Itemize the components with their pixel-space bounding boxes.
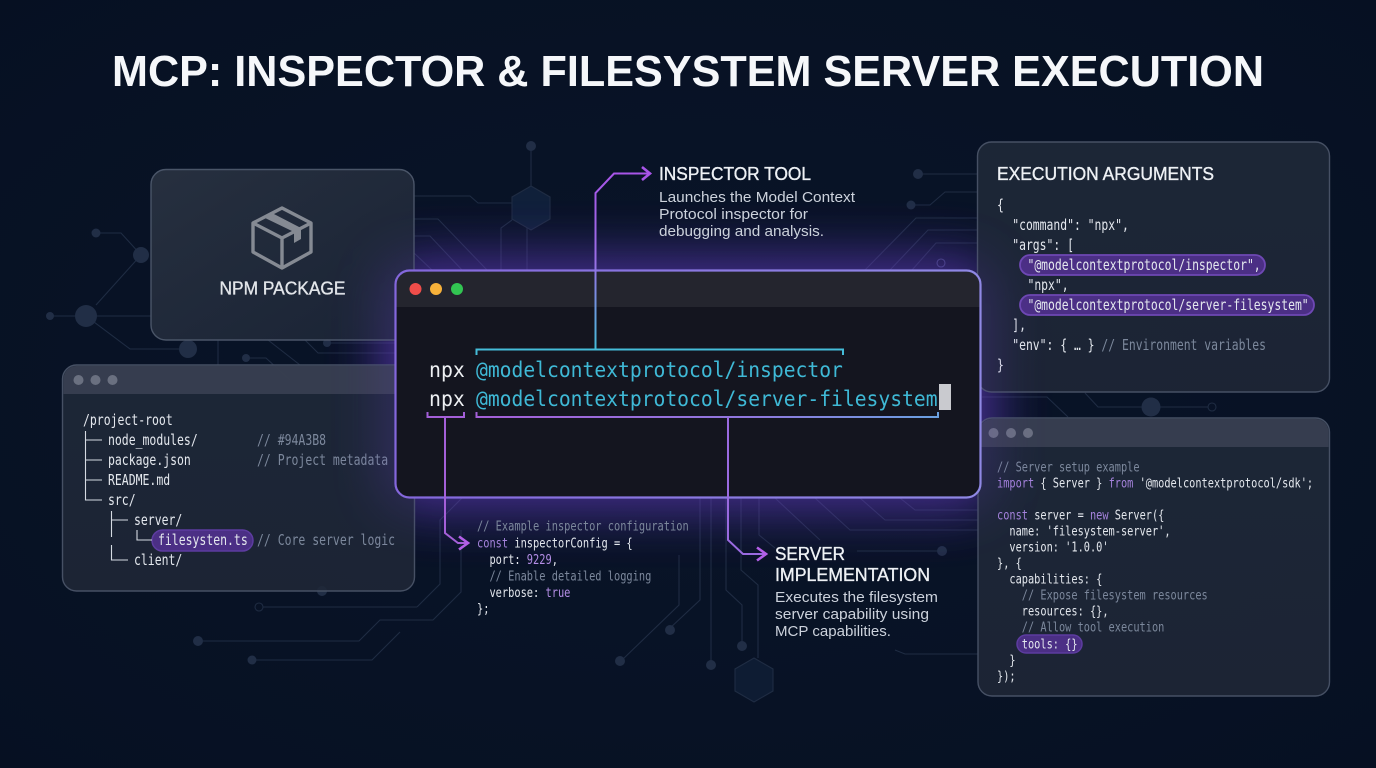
json code — [997, 198, 1309, 375]
circuit board traces — [46, 141, 1216, 702]
tree text: node_modules/ — [108, 433, 198, 449]
callout: inspector tool: Launches the Model Context — [659, 190, 855, 206]
window header — [979, 419, 1328, 447]
json code: "args": [ — [999, 238, 1074, 255]
json code: "env": { … } // Environment variables — [999, 338, 1266, 355]
arrow: to server implementation — [728, 417, 766, 560]
code block: inspector configuration: // Enable detailed logging — [477, 568, 651, 584]
code block: inspector configuration: const inspectorConfig = { — [477, 535, 633, 551]
server code — [997, 459, 1313, 684]
bracket: server package — [476, 412, 938, 417]
window header — [64, 366, 414, 394]
tree text: /project-root — [83, 413, 173, 429]
server code: }); — [997, 668, 1016, 684]
command text: npx — [429, 386, 465, 411]
tree text: // Project metadata — [257, 453, 388, 469]
server code: const server = new Server({ — [997, 507, 1164, 523]
json code: "@modelcontextprotocol/inspector", — [1000, 258, 1261, 275]
server code: }, { — [997, 555, 1022, 571]
callout: inspector tool: Protocol inspector for — [659, 207, 808, 223]
icon: package box — [253, 208, 311, 268]
panel: npm package — [151, 170, 414, 340]
panel: server setup code — [978, 418, 1330, 696]
server code: } — [997, 652, 1016, 668]
panel: terminal window — [396, 270, 980, 498]
window dots — [988, 428, 1033, 438]
server code: name: 'filesystem-server', — [997, 523, 1171, 539]
bracket: npx — [428, 412, 464, 417]
tree text: // Core server logic — [257, 533, 395, 549]
tree text: client/ — [134, 553, 182, 569]
terminal title bar — [396, 271, 980, 307]
server code: // Expose filesystem resources — [997, 587, 1208, 603]
package names — [476, 357, 938, 411]
cursor — [939, 384, 951, 410]
panel: project file tree — [62, 365, 414, 591]
server code: version: '1.0.0' — [997, 539, 1109, 555]
callout: server implementation: MCP capabilities. — [775, 624, 891, 640]
bracket: inspector package — [476, 350, 843, 355]
arrow: to inspector config — [445, 417, 468, 550]
json code: { — [997, 198, 1004, 215]
tree text: // #94A3B8 — [257, 433, 326, 449]
window dots — [74, 375, 118, 385]
tree text: server/ — [134, 513, 182, 529]
json code: "npx", — [1000, 278, 1069, 295]
heading: execution arguments: EXECUTION ARGUMENTS — [997, 164, 1214, 184]
callout: server implementation: IMPLEMENTATION — [775, 565, 930, 585]
callout: server implementation — [775, 544, 938, 640]
json code: "@modelcontextprotocol/server-filesystem" — [1000, 298, 1309, 315]
callout: server implementation: server capability using — [775, 607, 929, 623]
highlight: tools — [1017, 635, 1082, 653]
terminal glow — [385, 262, 991, 506]
callout: inspector tool: INSPECTOR TOOL — [659, 164, 811, 184]
terminal border — [396, 270, 980, 498]
command text — [429, 357, 465, 411]
json code: ], — [999, 318, 1026, 335]
code block: inspector configuration: verbose: true — [477, 585, 570, 600]
server code: // Allow tool execution — [997, 619, 1164, 635]
tree text: filesysten.ts — [158, 533, 248, 549]
server code: tools: {} — [997, 636, 1078, 652]
title: MCP: INSPECTOR & FILESYSTEM SERVER EXECUTION — [112, 48, 1264, 96]
arrow: to inspector tool — [596, 167, 650, 349]
server code: import { Server } from '@modelcontextprotocol/sdk'; — [997, 475, 1313, 491]
highlight: server argument — [1020, 295, 1314, 315]
server code: resources: {}, — [997, 603, 1109, 619]
callout: inspector tool: debugging and analysis. — [659, 224, 824, 240]
panel: execution arguments — [978, 142, 1330, 392]
code block: inspector configuration: // Example inspector configuration — [477, 518, 689, 534]
json code: } — [997, 358, 1004, 375]
package names: @modelcontextprotocol/server-filesystem — [476, 386, 938, 411]
server code: // Server setup example — [997, 459, 1140, 475]
highlight: inspector argument — [1020, 255, 1265, 275]
tree text — [83, 413, 395, 569]
callout: inspector tool — [659, 164, 855, 240]
tree text: package.json — [108, 453, 191, 469]
code block: inspector configuration — [477, 518, 689, 616]
json code: "command": "npx", — [999, 218, 1129, 235]
package names: @modelcontextprotocol/inspector — [476, 357, 843, 382]
code block: inspector configuration: port: 9229, — [477, 552, 558, 567]
server code: capabilities: { — [997, 571, 1102, 587]
callout: server implementation: SERVER — [775, 544, 845, 564]
glow over adjacent panels — [385, 262, 991, 506]
tree text: README.md — [108, 473, 170, 489]
command text: npx — [429, 357, 465, 382]
label: npm package: NPM PACKAGE — [220, 278, 346, 298]
tree connectors — [86, 431, 152, 560]
callout: server implementation: Executes the filesystem — [775, 590, 938, 606]
traffic lights — [410, 283, 463, 295]
code block: inspector configuration: }; — [477, 601, 489, 616]
highlight: filesysten.ts — [152, 530, 253, 551]
tree text: src/ — [108, 493, 136, 509]
